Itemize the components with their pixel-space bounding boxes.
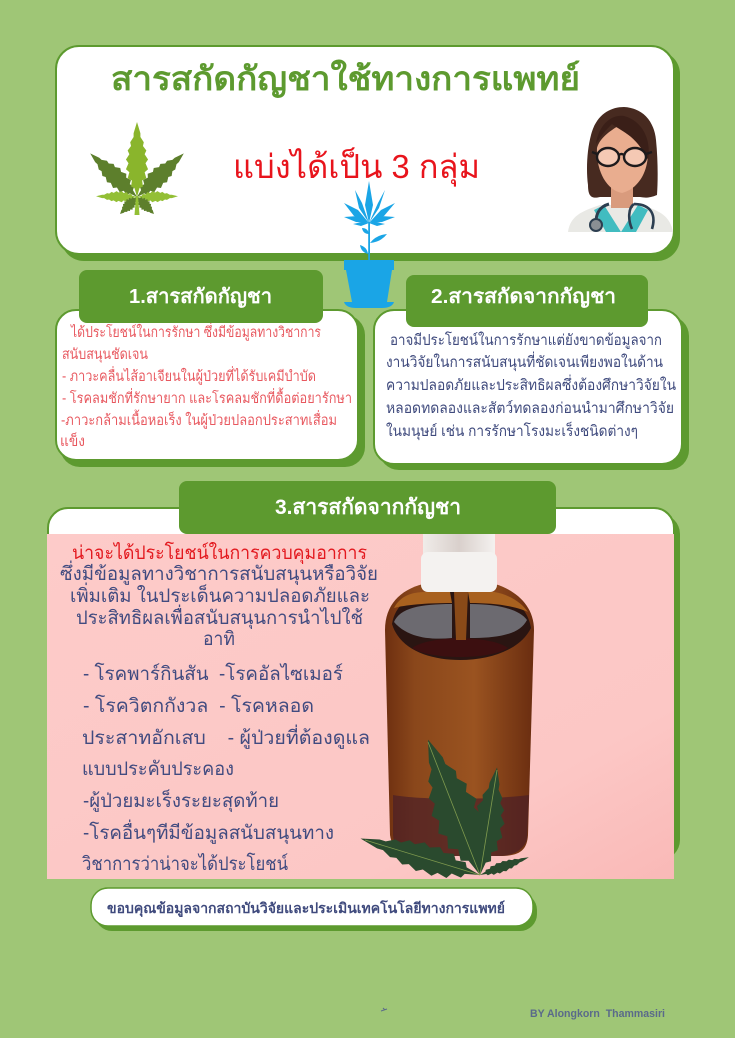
icon: cannabis leaf [84,122,190,218]
group 3 condition list: -ผู้ป่วยมะเร็งระยะสุดท้าย [83,788,279,813]
group 3 condition list: - โรควิตกกังวล - โรคหลอด [83,694,314,717]
credit pill [91,888,537,931]
group 3 intro text: ซึ่งมีข้อมูลทางวิชาการสนับสนุนหรือวิจัย [60,560,378,586]
group 2 body text: งานวิจัยในการสนับสนุนที่ชัดเจนเพียงพอในด้าน [386,351,663,372]
photo: amber bottle with cannabis leaf [47,534,674,889]
panel: group 3 card [47,508,680,889]
heading tab: group 2 [406,275,648,327]
group 3 condition list: ประสาทอักเสบ - ผู้ป่วยที่ต้องดูแล [82,724,370,749]
icon: doctor [568,107,673,232]
heading tab: group 2: 2.สารสกัดจากกัญชา [431,286,616,308]
group 3 intro text: น่าจะได้ประโยชน์ในการควบคุมอาการ [72,541,367,565]
heading tab: group 1: 1.สารสกัดกัญชา [129,286,272,308]
small mark [381,1008,387,1011]
author credit: BY Alongkorn Thammasiri [530,1008,665,1020]
subtitle: แบ่งได้เป็น 3 กลุ่ม [233,147,480,187]
group 1 body text: สนับสนุนชัดเจน [62,347,148,363]
heading tab: group 3 [179,481,556,534]
group 1 body text: -ภาวะกล้ามเนื้อหอเร็ง ในผู้ป่วยปลอกประสาทเสื่อม [61,409,337,429]
heading tab: group 1 [79,270,323,323]
group 3 condition list: -โรคอื่นๆทีมีข้อมูลสนับสนุนทาง [83,819,334,845]
group 1 body text: แข็ง [60,431,85,450]
group 3 condition list [82,662,370,875]
group 1 body text: - ภาวะคลื่นไส้อาเจียนในผู้ป่วยที่ได้รับเคมีบำบัด [62,366,316,385]
group 1 body text [60,322,352,450]
panel: group 1 card [56,310,365,467]
group 2 body text: ในมนุษย์ เช่น การรักษาโรงมะเร็งชนิดต่างๆ [386,421,638,441]
group 3 intro text [60,541,378,650]
group 3 condition list: แบบประคับประคอง [82,759,234,780]
panel: header card [56,46,680,261]
icon: blue potted plant [344,181,395,308]
group 1 body text: - โรคลมชักที่รักษายาก และโรคลมชักที่ดื้อต่อยารักษา [62,387,352,407]
panel: group 2 card [374,310,689,470]
credit pill: ขอบคุณข้อมูลจากสถาบันวิจัยและประเมินเทคโนโลยีทางการแพทย์ [107,899,505,917]
group 3 condition list: วิชาการว่าน่าจะได้ประโยชน์ [82,852,288,875]
group 2 body text: ความปลอดภัยและประสิทธิผลซึ่งต้องศึกษาวิจัยใน [386,374,676,394]
group 3 intro text: ประสิทธิผลเพื่อสนับสนุนการนำไปใช้ [76,604,363,630]
group 1 body text: ได้ประโยชน์ในการรักษา ซึ่งมีข้อมูลทางวิชาการ [70,322,321,341]
group 2 body text: หลอดทดลองและสัตว์ทดลองก่อนนำมาศึกษาวิจัย [386,400,674,417]
heading tab: group 3: 3.สารสกัดจากกัญชา [275,496,461,520]
group 3 condition list: - โรคพาร์กินสัน -โรคอัลไซเมอร์ [83,662,343,685]
title: สารสกัดกัญชาใช้ทางการแพทย์ [111,59,580,98]
group 2 body text [386,331,676,441]
group 3 intro text: อาทิ [203,629,235,650]
group 3 intro text: เพิ่มเติม ในประเด็นความปลอดภัยและ [70,582,370,607]
group 2 body text: อาจมีประโยชน์ในการรักษาแต่ยังขาดข้อมูลจาก [390,331,662,349]
